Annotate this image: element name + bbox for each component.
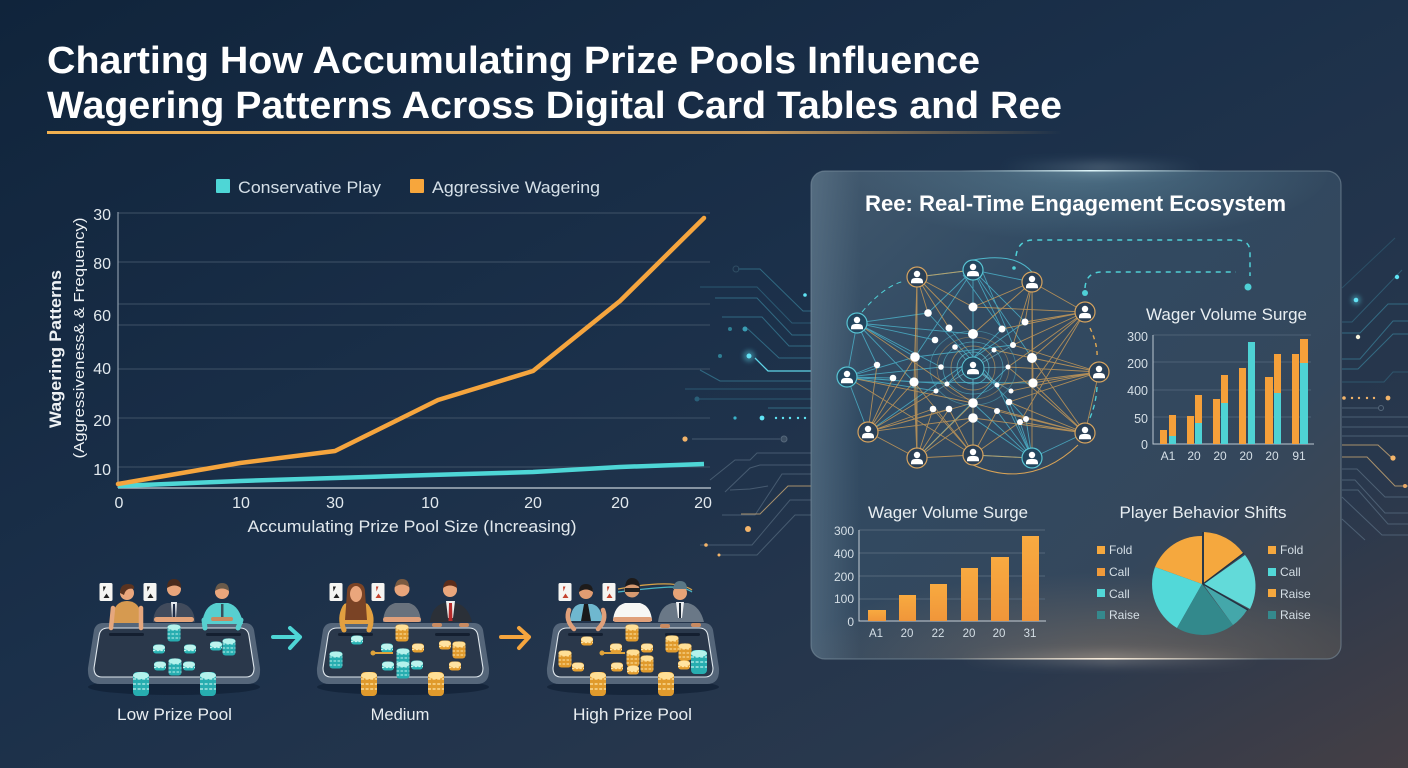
x axis labels: 20: [901, 628, 913, 640]
circuit nodes: right of panel: [1342, 275, 1407, 488]
legend right: Raise: [1280, 587, 1311, 601]
y axis tick labels: 10: [93, 462, 111, 479]
chart: wager volume surge (stacked, top right): [1127, 306, 1314, 463]
y axis labels: [1127, 330, 1148, 452]
x axis labels: 22: [932, 628, 944, 640]
player: man in gray shirt: [383, 579, 421, 622]
card icons: [100, 583, 156, 601]
chart heading: Wager Volume Surge: [1146, 306, 1307, 324]
arrow: teal: [273, 628, 300, 648]
x axis labels: A1: [869, 628, 883, 640]
chart heading: Wager Volume Surge: [868, 504, 1028, 522]
y axis labels: 100: [834, 592, 854, 606]
legend left: Call: [1109, 587, 1130, 601]
y axis labels: 0: [1141, 438, 1148, 452]
y axis labels: 300: [1127, 330, 1148, 344]
poker table: low prize pool: [88, 579, 260, 696]
y axis title: Wagering Patterns: [46, 270, 65, 428]
network orange links: [847, 270, 1099, 458]
panel: Ree ecosystem: [810, 158, 1342, 670]
y axis labels: 400: [834, 547, 854, 561]
chart: wager volume surge (bottom left): [834, 504, 1046, 640]
x axis tick labels: [115, 495, 712, 512]
chip stacks: [330, 624, 466, 696]
dashed connectors: [1012, 240, 1252, 296]
player: man in teal shirt: [202, 583, 243, 628]
network user nodes: [837, 260, 1109, 468]
poker table: high prize pool: [547, 578, 719, 696]
legend: main chart: [216, 178, 600, 197]
bars: [868, 536, 1039, 621]
network center rings: [930, 331, 1016, 405]
poker table: medium prize pool: [317, 579, 489, 696]
circuit nodes: left of panel: [682, 266, 807, 556]
legend left: Raise: [1109, 608, 1140, 622]
y axis tick labels: 40: [93, 361, 111, 378]
circuit traces: left of panel: [685, 269, 811, 555]
label: high prize pool: High Prize Pool: [573, 706, 692, 724]
player: woman with long hair: [340, 583, 372, 630]
x axis labels: 20: [963, 628, 975, 640]
player: man in blue vest: [568, 584, 604, 629]
x axis tick labels: 0: [115, 495, 124, 512]
y axis labels: 50: [1134, 412, 1148, 426]
legend left: Call: [1109, 565, 1130, 579]
x axis tick labels: 20: [524, 495, 542, 512]
y axis tick labels: 20: [93, 413, 111, 430]
circuit traces: right of panel: [1342, 238, 1408, 540]
x axis labels: 31: [1024, 628, 1036, 640]
chart gridlines and axes: [118, 212, 711, 488]
x axis labels: 91: [1292, 449, 1306, 463]
y axis labels: 400: [1127, 384, 1148, 398]
legend right: [1268, 543, 1311, 622]
bars: [1160, 339, 1308, 444]
inner white nodes: [874, 302, 1038, 425]
y axis tick labels: 80: [93, 256, 111, 273]
player: man in gray suit with hat: [658, 581, 704, 628]
card icons: [330, 583, 384, 601]
panel heading: Ree: Real-Time Engagement Ecosystem: [865, 191, 1286, 216]
x axis labels: 20: [1213, 449, 1227, 463]
x axis labels: [1161, 449, 1306, 463]
panel background: [810, 158, 1342, 670]
motion streaks: [618, 584, 692, 592]
legend: main chart: Aggressive Wagering: [432, 178, 600, 197]
x axis labels: 20: [1265, 449, 1279, 463]
network arcs: [862, 258, 1097, 474]
legend right: Call: [1280, 565, 1301, 579]
y axis tick labels: [93, 207, 111, 479]
y axis labels: 0: [847, 615, 854, 629]
y axis tick labels: 60: [93, 308, 111, 325]
title underline: [47, 131, 1062, 134]
title: Charting How Accumulating Prize Pools Influence: [47, 40, 980, 82]
legend right: Fold: [1280, 543, 1303, 557]
player: man in white shirt: [613, 578, 652, 622]
label: medium: Medium: [371, 706, 429, 724]
y axis labels: 300: [834, 524, 854, 538]
x axis title: Accumulating Prize Pool Size (Increasing): [248, 517, 576, 536]
pie chart: [1152, 532, 1255, 635]
chart: player behavior shifts: [1097, 504, 1311, 635]
card icons: [558, 583, 616, 601]
chip stacks: [558, 624, 707, 696]
y axis title: [46, 217, 88, 458]
y axis title: (Aggressiveness& & Frequency): [71, 217, 88, 458]
legend left: Fold: [1109, 543, 1132, 557]
legend right: Raise: [1280, 608, 1311, 622]
label: low prize pool: Low Prize Pool: [117, 706, 232, 724]
x axis labels: A1: [1161, 449, 1176, 463]
legend: main chart: Conservative Play: [238, 178, 382, 197]
x axis tick labels: 30: [326, 495, 344, 512]
chart heading: Player Behavior Shifts: [1120, 504, 1286, 522]
arrow: orange: [501, 628, 529, 648]
x axis labels: 20: [1187, 449, 1201, 463]
y axis labels: 200: [834, 570, 854, 584]
y axis labels: [834, 524, 854, 629]
y axis tick labels: 30: [93, 207, 111, 224]
aggressive wagering line: [118, 218, 704, 484]
title: [47, 40, 1062, 127]
x axis labels: 20: [993, 628, 1005, 640]
chip stacks: [133, 624, 236, 696]
player: woman in orange: [111, 584, 143, 628]
conservative play line: [118, 464, 704, 486]
title: Wagering Patterns Across Digital Card Tables and Ree: [47, 85, 1062, 127]
x axis tick labels: 10: [421, 495, 439, 512]
x axis tick labels: 20: [694, 495, 712, 512]
player: man in dark suit: [153, 579, 195, 622]
y axis labels: 200: [1127, 357, 1148, 371]
x axis tick labels: 10: [232, 495, 250, 512]
x axis labels: 20: [1239, 449, 1253, 463]
x axis tick labels: 20: [611, 495, 629, 512]
network diagram: [837, 258, 1109, 474]
legend left: [1097, 543, 1140, 622]
line chart: wagering patterns vs prize pool: [93, 207, 712, 512]
network teal links: [847, 270, 1085, 458]
x axis labels: [869, 628, 1036, 640]
player: man in dark suit and red tie: [430, 580, 472, 627]
